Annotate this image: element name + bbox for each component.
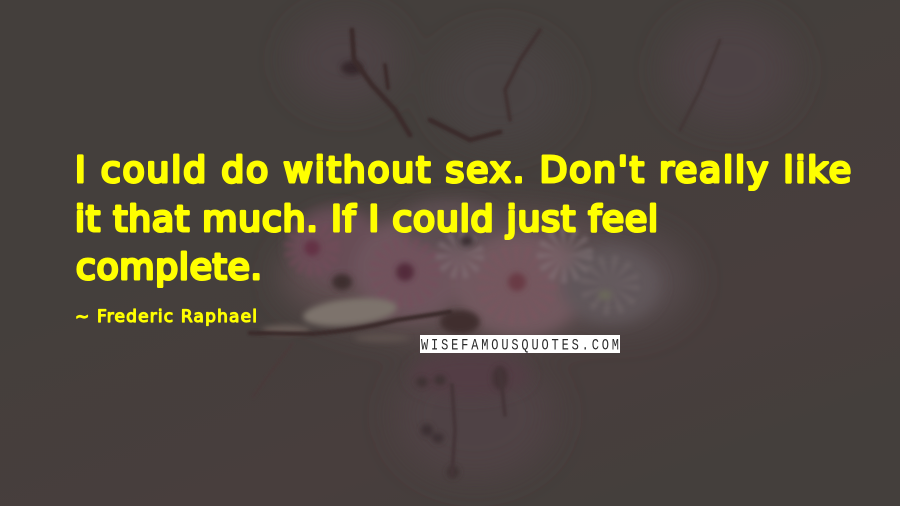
attribution: ~ Frederic Raphael [75,307,257,327]
quote text: it that much. If I could just feel [75,199,658,240]
quote text [75,150,851,288]
quote text: complete. [76,247,262,288]
quote text: I could do without sex. Don't really like [75,150,851,191]
watermark logo: WISEFAMOUSQUOTES.COM [421,337,619,355]
